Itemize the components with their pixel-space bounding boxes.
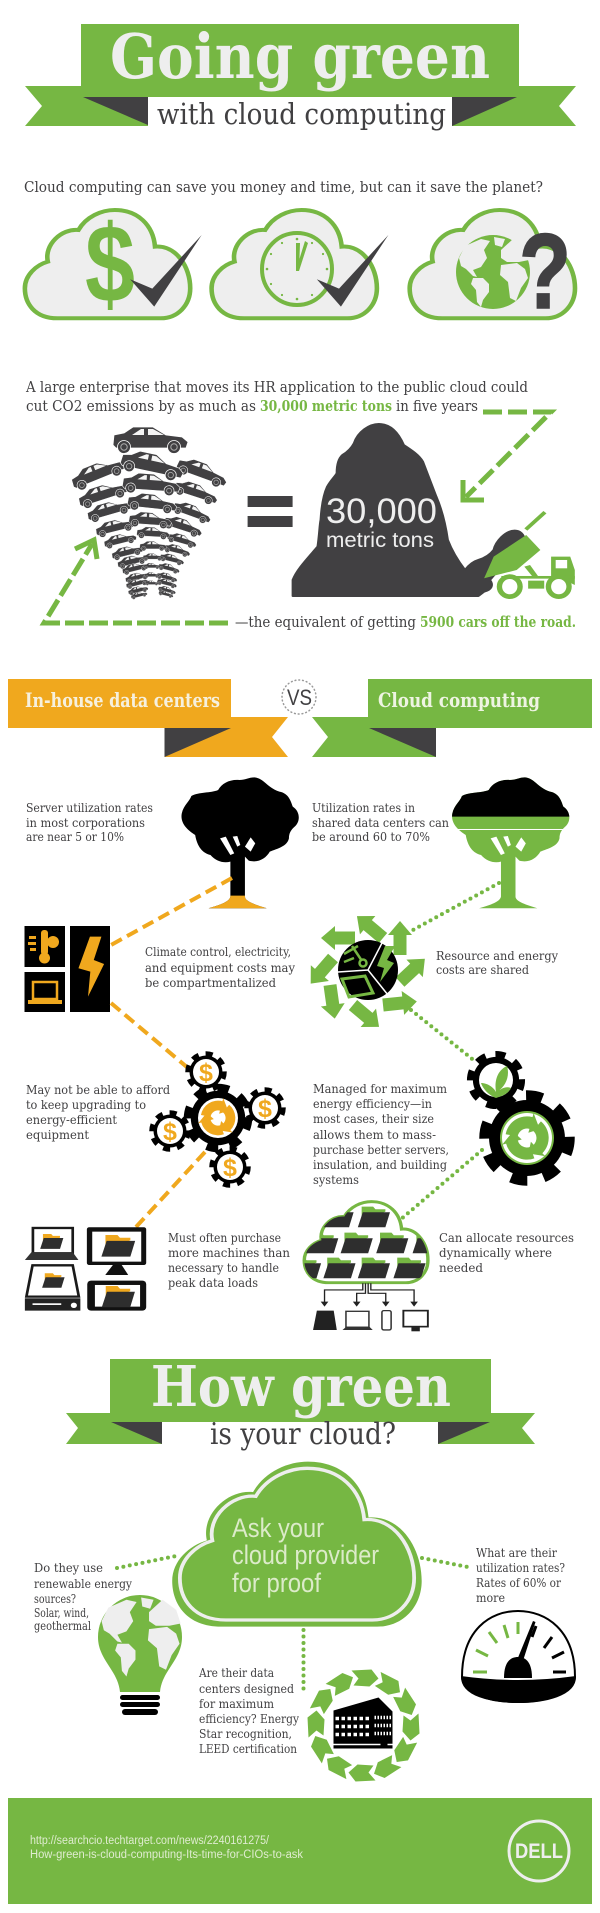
icon: phone (87, 1281, 146, 1311)
icon: office building (334, 1698, 392, 1748)
icon: gauge (461, 1611, 576, 1703)
connector: green dots, tree to arrows (411, 883, 499, 931)
text: ask your cloud provider: Ask your (232, 1513, 324, 1543)
text: upgrade affordability: May not be able to afford (26, 1083, 170, 1097)
text: buying more machines: more machines than (168, 1246, 290, 1260)
figure 30,000: 30,000 (326, 492, 437, 531)
source link: http://searchcio.techtarget.com/news/2240161275/ (30, 1835, 270, 1847)
icon: small phone (382, 1311, 391, 1330)
text: utilization in shared data centers: be around 60 to 70% (312, 830, 430, 844)
panel: title banner (25, 20, 576, 131)
icon: small monitor (403, 1311, 428, 1331)
connector: orange dashes, tree to cost boxes (111, 878, 232, 945)
text: climate control: and equipment costs may (145, 961, 295, 975)
text: climate control: Climate control, electricity, (145, 945, 291, 959)
icon: cloud with clock and check (212, 210, 388, 318)
icon: mostly green tree (452, 777, 569, 908)
text: enterprise CO2 claim: 30,000 metric tons (260, 397, 392, 415)
text: efficient data centers question (198, 1666, 299, 1756)
text: server utilization: Server utilization rates (26, 801, 153, 815)
text: upgrade affordability: to keep upgrading to (26, 1098, 146, 1112)
heading: In-house data centers ribbon (8, 679, 288, 757)
icon: Dell logo (509, 1821, 569, 1881)
text: climate control: be compartmentalized (145, 976, 276, 990)
icon: large cloud callout (172, 1462, 422, 1627)
icon: mostly black tree (181, 777, 299, 908)
text: efficient data centers question: for maximum (199, 1697, 275, 1711)
subtitle: with cloud computing (157, 97, 446, 131)
text: utilization in shared data centers: Utilization rates in (312, 801, 415, 815)
icon: drive (313, 1311, 337, 1330)
icons: compartmentalized cost boxes (24, 926, 110, 1012)
icon: mountain of coal (293, 424, 524, 596)
text: ask your cloud provider: cloud provider (232, 1540, 379, 1570)
icon: light bulb globe (98, 1595, 182, 1715)
heading: Cloud computing ribbon (312, 679, 592, 757)
text: allocate resources: dynamically where (439, 1246, 552, 1260)
text: upgrade affordability: energy-efficient (26, 1113, 117, 1127)
panel: footer (8, 1798, 592, 1904)
text: renewable energy question: Solar, wind, (34, 1606, 89, 1620)
text: efficient data centers question: Star recognition, (199, 1727, 292, 1741)
text: efficient data centers question: efficiency? Energy (199, 1712, 299, 1726)
text: ask your cloud provider: for proof (232, 1568, 321, 1598)
title: Going green (110, 20, 490, 93)
icon: green plant and recycling gears (471, 1055, 568, 1179)
icon: Dell logo: DELL (515, 1840, 563, 1863)
text: server utilization: in most corporations (26, 816, 145, 830)
text: efficient data centers question: LEED certification (199, 1742, 297, 1756)
text: renewable energy question: Do they use (34, 1561, 103, 1575)
icon: small laptop (343, 1311, 373, 1330)
subtitle: is your cloud? (210, 1417, 396, 1452)
source link (30, 1835, 303, 1861)
text: server utilization: are near 5 or 10% (26, 830, 124, 844)
icon: cloud of folders with device branches (302, 1200, 430, 1332)
text: utilization rates question: utilization rates? (476, 1561, 565, 1575)
text: allocate resources: needed (439, 1261, 483, 1275)
icon: thermometer (28, 930, 59, 964)
text: managed for efficiency: energy efficiency—in (313, 1097, 432, 1111)
text: managed for efficiency: Managed for maximum (313, 1082, 448, 1096)
icon: shared-costs pie ringed by arrows (302, 907, 433, 1036)
connector: green dots, arrows to gears (411, 1010, 476, 1062)
connector: orange dashes, boxes to gears (111, 1003, 188, 1068)
text: managed for efficiency: most cases, their size (313, 1112, 434, 1126)
icon: lightning bolt (78, 937, 104, 997)
text: managed for efficiency: allows them to mass- (313, 1128, 436, 1142)
arrow: dashed bottom left (44, 540, 228, 623)
text: resource and energy (436, 949, 558, 977)
label metric tons: metric tons (326, 529, 434, 552)
text: utilization in shared data centers: shared data centers can (312, 816, 449, 830)
icon: orange dollar gears: $ (258, 1095, 272, 1123)
icon: dump truck (484, 511, 575, 597)
text: buying more machines: necessary to handle (168, 1261, 279, 1275)
icon: server box (25, 1265, 80, 1311)
icon: laptop (28, 982, 62, 1002)
branches (325, 1283, 414, 1303)
text: efficient data centers question: centers designed (199, 1682, 294, 1696)
connector: dots, cloud to renewable energy (117, 1556, 176, 1568)
text: utilization rates question (476, 1546, 565, 1605)
text: renewable energy question: sources? (34, 1592, 76, 1606)
icon: building in arrow ring (308, 1670, 420, 1782)
text: utilization rates question: Rates of 60% or (476, 1576, 561, 1590)
arrow: dashed top right (463, 412, 551, 500)
text: renewable energy question: renewable energy (34, 1577, 132, 1591)
text: enterprise CO2 claim: in five years (396, 397, 478, 415)
text: resource and energy: Resource and energy (436, 949, 558, 963)
icon: cloud with globe and question mark: ? (519, 211, 571, 331)
text: utilization rates question: more (476, 1591, 505, 1605)
source link: How-green-is-cloud-computing-Its-time-for-CIOs-to-ask (30, 1849, 303, 1861)
text: utilization rates question: What are their (476, 1546, 557, 1560)
text: renewable energy question: geothermal (34, 1619, 91, 1633)
text: buying more machines: peak data loads (168, 1276, 258, 1290)
text: utilization in shared data centers (312, 801, 449, 844)
icon: equals sign (248, 496, 293, 527)
icon: orange dollar gears: $ (163, 1118, 177, 1146)
heading: Cloud computing ribbon: Cloud computing (378, 688, 540, 712)
text: enterprise CO2 claim: cut CO2 emissions by as much as (26, 397, 256, 415)
icon: VS badge (282, 680, 316, 714)
icon: cloud with dollar and check (25, 203, 202, 326)
icon: orange dollar gears: $ (223, 1154, 237, 1182)
text: managed for efficiency: insulation, and building (313, 1158, 447, 1172)
icon: VS badge: VS (287, 685, 312, 710)
icon: desktop monitor (87, 1227, 146, 1275)
icon: cloud with globe and question mark (410, 210, 575, 331)
panel: How green banner (66, 1354, 535, 1452)
text: managed for efficiency: systems (313, 1173, 359, 1187)
connector: dots, cloud to building (302, 1630, 306, 1690)
text: upgrade affordability (26, 1083, 170, 1142)
text: 5900 cars equivalent (235, 613, 576, 631)
text: ask your cloud provider (232, 1513, 379, 1598)
text: buying more machines (168, 1231, 290, 1290)
intro text: Cloud computing can save you money and time, but can it save the planet? (24, 178, 543, 196)
connector: green dots, gears to cloud (400, 1150, 482, 1220)
text: allocate resources (439, 1231, 574, 1275)
text: buying more machines: Must often purchase (168, 1231, 281, 1245)
icon: laptop (25, 1228, 78, 1260)
text: renewable energy question (34, 1561, 132, 1633)
icon: orange dollar gears (152, 1054, 283, 1185)
text: upgrade affordability: equipment (26, 1128, 89, 1142)
connector: orange dashes, gears to devices (136, 1152, 205, 1227)
text: climate control (145, 945, 295, 990)
icon: orange dollar gears: $ (199, 1059, 213, 1087)
text: 5900 cars equivalent: —the equivalent of getting (235, 613, 416, 631)
text: resource and energy: costs are shared (436, 963, 529, 977)
text: allocate resources: Can allocate resources (439, 1231, 574, 1245)
icon: cloud with dollar and check: $ (85, 203, 135, 326)
text: managed for efficiency (313, 1082, 449, 1187)
heading: In-house data centers ribbon: In-house data centers (25, 688, 220, 712)
text: enterprise CO2 claim (25, 378, 528, 415)
connector: dots, cloud to utilization (422, 1558, 473, 1568)
text: efficient data centers question: Are their data (198, 1666, 274, 1680)
text: enterprise CO2 claim: A large enterprise that moves its HR application to the public cloud could (25, 378, 528, 396)
title: How green (151, 1354, 451, 1420)
text: server utilization (26, 801, 153, 844)
icon: in-house devices with orange folders (25, 1227, 146, 1311)
icon: cone of cars (69, 427, 230, 600)
text: managed for efficiency: purchase better servers, (313, 1143, 449, 1157)
